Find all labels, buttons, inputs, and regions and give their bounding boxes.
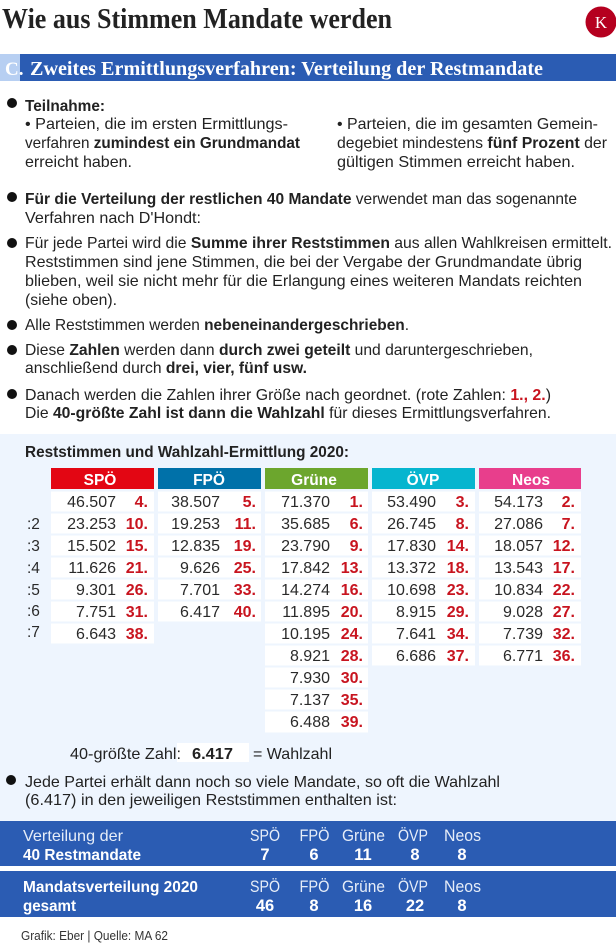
column: Grüne: 11.895: [282, 604, 330, 621]
bar: Verteilung der 40 Restmandate: 40 Restmandate: [23, 847, 141, 864]
column: SPÖ: SPÖ: [84, 472, 116, 489]
column: Grüne: 13.: [341, 560, 363, 577]
column: Neos: 7.: [562, 516, 575, 533]
bar: Mandatsverteilung 2020 gesamt: 22: [406, 897, 424, 915]
column: Neos: 6.771: [503, 648, 543, 665]
text block: Summe der Reststimmen: blieben, weil sie nicht mehr für die Erlangung eines weiteren Mandats reichten: [25, 273, 582, 290]
column: SPÖ: 7.751: [76, 604, 116, 621]
column: SPÖ: 31.: [126, 604, 148, 621]
bar: Mandatsverteilung 2020 gesamt: Grüne: [342, 878, 385, 896]
text block: teilen: anschließend durch drei, vier, fünf usw.: [25, 360, 307, 377]
text block: teilen: Diese Zahlen werden dann durch zwei geteilt und daruntergeschrieben,: [25, 342, 533, 359]
divisor labels: :4: [27, 560, 40, 577]
column: Grüne: 8.921: [290, 648, 330, 665]
divisor labels: :6: [27, 603, 40, 620]
column: Neos: 13.543: [494, 560, 543, 577]
column: FPÖ: 33.: [234, 582, 256, 599]
text block: Teilnahme: • Parteien, die im gesamten Gemein-: [337, 116, 598, 133]
column: FPÖ: 38.507: [171, 494, 220, 511]
column: Grüne: Grüne: [291, 472, 337, 489]
divisor labels: :7: [27, 624, 40, 641]
text block: Jede Partei: (6.417) in den jeweiligen Reststimmen enthalten ist:: [25, 792, 397, 809]
column: Grüne: 35.685: [281, 516, 330, 533]
column: Grüne: 16.: [341, 582, 363, 599]
text block: nebeneinander: Alle Reststimmen werden nebeneinandergeschrieben.: [25, 317, 409, 334]
column: Grüne: [265, 468, 368, 732]
Wahlzahl result: 6.417: [192, 746, 233, 763]
text block: teilen: [7, 342, 533, 377]
column: SPÖ: 23.253: [67, 516, 116, 533]
column: Neos: 32.: [553, 626, 575, 643]
column: Neos: 18.057: [494, 538, 543, 555]
divisor labels: :3: [27, 538, 40, 555]
icon: logo K: K: [595, 13, 608, 32]
text block: Teilnahme: degebiet mindestens fünf Prozent der: [337, 135, 608, 152]
column: ÖVP: 29.: [447, 604, 469, 621]
column: Grüne: 20.: [341, 604, 363, 621]
text block: Teilnahme: Teilnahme:: [25, 98, 105, 115]
column: ÖVP: [372, 468, 475, 666]
bar: Mandatsverteilung 2020 gesamt: 8: [457, 897, 467, 915]
column: FPÖ: 5.: [243, 494, 256, 511]
text block: restliche 40 Mandate: Für die Verteilung der restlichen 40 Mandate verwendet man das sogenannte: [25, 191, 577, 208]
column: Neos: 54.173: [494, 494, 543, 511]
column: ÖVP: 53.490: [387, 494, 436, 511]
column: SPÖ: 26.: [126, 582, 148, 599]
column: Grüne: 9.: [350, 538, 363, 555]
column: Grüne: 7.137: [290, 692, 330, 709]
column: ÖVP: 37.: [447, 648, 469, 665]
column: SPÖ: 10.: [126, 516, 148, 533]
column: SPÖ: 11.626: [68, 560, 116, 577]
bar: Mandatsverteilung 2020 gesamt: 46: [256, 897, 274, 915]
column: Grüne: 17.842: [281, 560, 330, 577]
text block: Teilnahme: erreicht haben.: [25, 154, 132, 171]
icon: logo K: [586, 6, 616, 38]
source credit: Grafik: Eber | Quelle: MA 62: [21, 929, 168, 943]
column: Neos: 2.: [562, 494, 575, 511]
section heading: Zweites Ermittlungsverfahren: Verteilung der Restmandate: [30, 58, 543, 80]
bar: Verteilung der 40 Restmandate: 8: [410, 846, 420, 864]
text block: Teilnahme: [7, 98, 608, 171]
bar: Verteilung der 40 Restmandate: ÖVP: [398, 827, 428, 845]
column: Grüne: 7.930: [290, 670, 330, 687]
column: ÖVP: 7.641: [396, 626, 436, 643]
table heading: Reststimmen und Wahlzahl-Ermittlung 2020:: [25, 444, 349, 461]
column: FPÖ: 40.: [234, 604, 256, 621]
bar: Verteilung der 40 Restmandate: Grüne: [342, 827, 385, 845]
column: Grüne: 35.: [341, 692, 363, 709]
text block: Teilnahme: verfahren zumindest ein Grundmandat: [25, 135, 301, 152]
bar: Verteilung der 40 Restmandate: Verteilung der: [23, 828, 124, 845]
column: FPÖ: 25.: [234, 560, 256, 577]
text block: Teilnahme: • Parteien, die im ersten Ermittlungs-: [25, 116, 288, 133]
column: SPÖ: 15.502: [67, 538, 116, 555]
bar: Verteilung der 40 Restmandate: FPÖ: [300, 827, 330, 845]
column: ÖVP: 23.: [447, 582, 469, 599]
column: ÖVP: 8.915: [396, 604, 436, 621]
column: Neos: 27.: [553, 604, 575, 621]
column: FPÖ: 19.253: [171, 516, 220, 533]
column: FPÖ: [158, 468, 261, 622]
section heading: [0, 54, 616, 81]
Wahlzahl result: 40-größte Zahl:: [70, 746, 181, 763]
Wahlzahl result: [70, 743, 332, 763]
divisor labels: [27, 516, 40, 641]
text block: restliche 40 Mandate: [7, 191, 577, 227]
column: FPÖ: 9.626: [180, 560, 220, 577]
column: ÖVP: 14.: [447, 538, 469, 555]
column: ÖVP: 18.: [447, 560, 469, 577]
bar: Verteilung der 40 Restmandate: SPÖ: [250, 827, 280, 845]
column: Grüne: 10.195: [281, 626, 330, 643]
column: Neos: 9.028: [503, 604, 543, 621]
bar: Mandatsverteilung 2020 gesamt: ÖVP: [398, 878, 428, 896]
column: Neos: 27.086: [494, 516, 543, 533]
text block: Summe der Reststimmen: Für jede Partei wird die Summe ihrer Reststimmen aus allen Wahlkreisen ermittelt.: [25, 235, 612, 252]
column: Grüne: 39.: [341, 714, 363, 731]
column: Neos: 7.739: [503, 626, 543, 643]
bar: Verteilung der 40 Restmandate: 6: [309, 846, 319, 864]
column: Grüne: 1.: [350, 494, 363, 511]
column: Neos: [479, 468, 581, 666]
text block: Jede Partei: Jede Partei erhält dann noch so viele Mandate, so oft die Wahlzahl: [25, 774, 500, 791]
bar: Mandatsverteilung 2020 gesamt: 8: [309, 897, 319, 915]
column: Grüne: 71.370: [281, 494, 330, 511]
column: FPÖ: 12.835: [171, 538, 220, 555]
column: SPÖ: 46.507: [67, 494, 116, 511]
column: Grüne: 6.: [350, 516, 363, 533]
bar: Mandatsverteilung 2020 gesamt: gesamt: [23, 898, 77, 915]
column: SPÖ: 6.643: [76, 626, 116, 643]
divisor labels: :2: [27, 516, 40, 533]
bar: Verteilung der 40 Restmandate: 11: [354, 846, 372, 864]
column: ÖVP: 6.686: [396, 648, 436, 665]
column: ÖVP: ÖVP: [407, 472, 439, 489]
column: SPÖ: [51, 468, 154, 644]
column: ÖVP: 26.745: [387, 516, 436, 533]
column: Neos: Neos: [512, 472, 550, 489]
text block: restliche 40 Mandate: Verfahren nach D'Hondt:: [25, 210, 201, 227]
text block: Jede Partei: [6, 774, 500, 809]
text block: Teilnahme: gültigen Stimmen erreicht haben.: [337, 154, 575, 171]
bar: Verteilung der 40 Restmandate: Neos: [444, 827, 481, 845]
section heading: C.: [5, 59, 23, 80]
column: Grüne: 6.488: [290, 714, 330, 731]
panel: Wahlzahl-Ermittlung: [0, 434, 616, 821]
column: Neos: 10.834: [494, 582, 543, 599]
bar: Mandatsverteilung 2020 gesamt: SPÖ: [250, 878, 280, 896]
bar: Mandatsverteilung 2020 gesamt: [0, 871, 616, 917]
column: ÖVP: 3.: [456, 494, 469, 511]
column: Grüne: 28.: [341, 648, 363, 665]
column: ÖVP: 17.830: [387, 538, 436, 555]
bar: Verteilung der 40 Restmandate: [0, 821, 616, 866]
column: SPÖ: 38.: [126, 626, 148, 643]
column: Grüne: 14.274: [281, 582, 330, 599]
column: Neos: 17.: [553, 560, 575, 577]
bar: Verteilung der 40 Restmandate: 8: [457, 846, 467, 864]
title: Wie aus Stimmen Mandate werden: [2, 4, 392, 35]
column: FPÖ: 11.: [235, 516, 256, 533]
column: Grüne: 24.: [341, 626, 363, 643]
column: SPÖ: 4.: [135, 494, 148, 511]
bar: Mandatsverteilung 2020 gesamt: 16: [354, 897, 372, 915]
column: ÖVP: 34.: [447, 626, 469, 643]
bar: Mandatsverteilung 2020 gesamt: FPÖ: [300, 878, 330, 896]
Wahlzahl result: = Wahlzahl: [253, 746, 332, 763]
column: FPÖ: 6.417: [180, 604, 220, 621]
text block: Summe der Reststimmen: [7, 235, 612, 309]
column: Neos: 22.: [553, 582, 575, 599]
bar: Verteilung der 40 Restmandate: 7: [260, 846, 270, 864]
column: SPÖ: 15.: [126, 538, 148, 555]
column: FPÖ: FPÖ: [193, 472, 225, 489]
column: ÖVP: 10.698: [387, 582, 436, 599]
bar: Mandatsverteilung 2020 gesamt: Mandatsverteilung 2020: [23, 879, 198, 896]
text block: Summe der Reststimmen: (siehe oben).: [25, 292, 117, 309]
column: Grüne: 30.: [341, 670, 363, 687]
text block: ordnen: Die 40-größte Zahl ist dann die Wahlzahl für dieses Ermittlungsverfahren.: [25, 405, 551, 422]
column: Neos: 12.: [553, 538, 575, 555]
text block: ordnen: [7, 387, 551, 422]
column: ÖVP: 8.: [456, 516, 469, 533]
column: Grüne: 23.790: [281, 538, 330, 555]
column: ÖVP: 13.372: [387, 560, 436, 577]
column: FPÖ: 7.701: [180, 582, 220, 599]
column: SPÖ: 21.: [126, 560, 148, 577]
column: Neos: 36.: [553, 648, 575, 665]
text block: Summe der Reststimmen: Reststimmen sind jene Stimmen, die bei der Vergabe der Grundmandate übrig: [25, 254, 582, 271]
bar: Mandatsverteilung 2020 gesamt: Neos: [444, 878, 481, 896]
column: FPÖ: 19.: [234, 538, 256, 555]
column: SPÖ: 9.301: [76, 582, 116, 599]
text block: ordnen: Danach werden die Zahlen ihrer Größe nach geordnet. (rote Zahlen: 1., 2.): [25, 387, 551, 404]
divisor labels: :5: [27, 582, 40, 599]
